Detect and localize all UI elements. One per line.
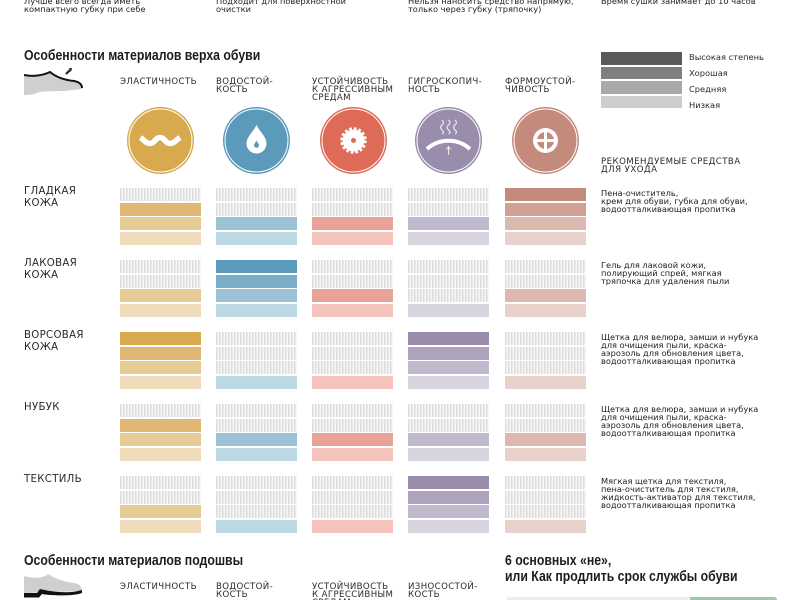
care: nubuck: аэрозоль для обновления цвета, [601,420,744,430]
care: suede leather: Щетка для велюра, замши и нубука [601,332,758,342]
row label: suede leather [24,330,84,353]
heading: upper materials: Особенности материалов верха обуви [24,48,260,64]
intro note: surface cleaning: очистки [216,4,251,14]
care: nubuck: водоотталкивающая пропитка [601,428,736,438]
heading: six don'ts: 6 основных «не», [505,553,611,569]
rating bars: patent leather [120,260,586,317]
column label: elasticity: ЭЛАСТИЧНОСТЬ [120,77,197,87]
sole label: wear resistance: ИЗНОСОСТОЙ- [408,582,478,592]
care: textile: пена-очиститель для текстиля, [601,484,739,494]
care: patent leather: тряпочка для удаления пыли [601,276,729,286]
sole label: water resistance [216,580,273,600]
tab bar [506,597,777,600]
care products heading: ДЛЯ УХОДА [601,165,657,175]
icon: elasticity wave [127,107,194,174]
row label: suede leather: КОЖА [24,342,58,353]
care: suede leather: для очищения пыли, краска- [601,340,727,350]
intro note: application: только через губку (тряпочку) [408,4,541,14]
intro note: sponge: компактную губку при себе [24,4,146,14]
row label: nubuck: НУБУК [24,402,60,413]
care: smooth leather [601,188,748,214]
row label: patent leather [24,258,77,281]
care: textile: Мягкая щетка для текстиля, [601,476,726,486]
icon: saw blade [320,107,387,174]
row label: smooth leather [24,186,76,209]
care: suede leather: водоотталкивающая пропитка [601,356,736,366]
icon: shoe sole [24,574,82,598]
legend [601,52,764,110]
intro note: application [408,0,574,14]
care: patent leather [601,260,729,286]
column label: aggressive media: УСТОЙЧИВОСТЬ [312,77,388,87]
care: suede leather [601,332,758,366]
column label: water resistance [216,76,273,95]
rating bars: suede leather [120,332,586,389]
icon: water drop [223,107,290,174]
row label: smooth leather: ГЛАДКАЯ [24,186,76,197]
row label: suede leather: ВОРСОВАЯ [24,330,84,341]
sole label: wear resistance [408,580,478,600]
column label: hygroscopicity [408,77,482,95]
sole label: aggressive media [312,580,393,600]
care: textile [601,476,756,510]
care: smooth leather: водоотталкивающая пропитка [601,204,736,214]
care products heading: РЕКОМЕНДУЕМЫЕ СРЕДСТВА [601,157,741,167]
column label: aggressive media: К АГРЕССИВНЫМ [312,85,393,95]
column label: hygroscopicity: НОСТЬ [408,85,440,95]
icon: shape retention [512,107,579,174]
row label: patent leather: КОЖА [24,270,58,281]
icon: hygroscopicity [415,107,482,174]
sole label: water resistance: ВОДОСТОЙ- [216,582,273,592]
legend: Средняя [689,84,726,94]
care: suede leather: аэрозоль для обновления цвета, [601,348,744,358]
care: textile: водоотталкивающая пропитка [601,500,736,510]
care: nubuck [601,404,758,438]
icon: shoe upper [24,68,83,95]
care: patent leather: полирующий спрей, мягкая [601,268,722,278]
rating bars: smooth leather [120,188,586,245]
sole label: elasticity: ЭЛАСТИЧНОСТЬ [120,582,197,592]
sole label: water resistance: КОСТЬ [216,590,248,600]
column label: shape retention: ЧИВОСТЬ [505,85,550,95]
care: nubuck: для очищения пыли, краска- [601,412,727,422]
heading: six don'ts: или Как продлить срок службы обуви [505,569,738,585]
column label: shape retention: ФОРМОУСТОЙ- [505,77,575,87]
sole label: aggressive media: УСТОЙЧИВОСТЬ [312,582,388,592]
column label: hygroscopicity: ГИГРОСКОПИЧ- [408,77,482,87]
rating bars: textile [120,476,586,533]
column label: aggressive media: СРЕДАМ [312,93,351,103]
care: smooth leather: Пена-очиститель, [601,188,678,198]
row label: textile: ТЕКСТИЛЬ [24,474,82,485]
care: smooth leather: крем для обуви, губка для обуви, [601,196,748,206]
column label: water resistance: КОСТЬ [216,85,248,95]
row label: smooth leather: КОЖА [24,198,58,209]
column label: water resistance: ВОДОСТОЙ- [216,77,273,87]
sole label: wear resistance: КОСТЬ [408,590,440,600]
care: nubuck: Щетка для велюра, замши и нубука [601,404,758,414]
legend: Хорошая [689,68,728,78]
column label: shape retention [505,76,575,95]
intro note: surface cleaning [216,0,346,14]
care: textile: жидкость-активатор для текстиля, [601,492,756,502]
care products heading [601,157,741,175]
heading: six don'ts [505,553,738,585]
row label: patent leather: ЛАКОВАЯ [24,258,77,269]
rating bars: nubuck [120,404,586,461]
legend: Низкая [689,100,720,110]
column label: aggressive media [312,76,393,103]
care: patent leather: Гель для лаковой кожи, [601,260,706,270]
sole label: aggressive media: К АГРЕССИВНЫМ [312,590,393,600]
legend: Высокая степень [689,52,764,62]
heading: sole materials: Особенности материалов подошвы [24,553,243,569]
